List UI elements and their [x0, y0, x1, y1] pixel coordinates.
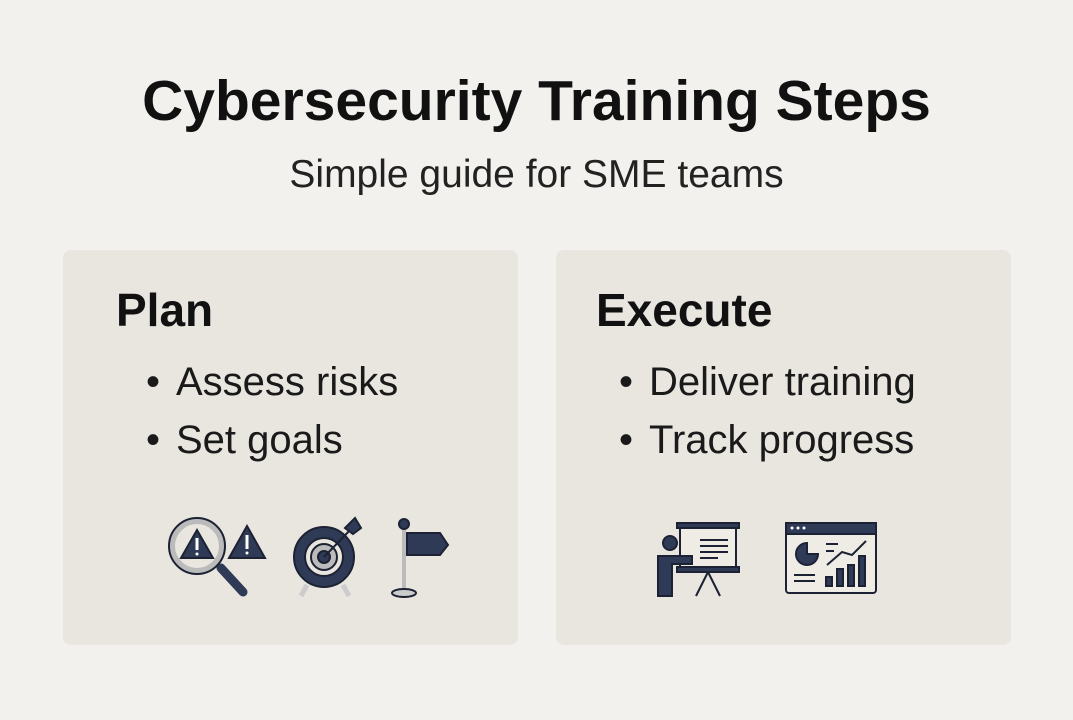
icons: plan [168, 516, 450, 598]
heading: execute: Execute [596, 284, 772, 336]
panel: plan: • [146, 418, 160, 462]
bullet: deliver training: Deliver training [649, 360, 916, 404]
icon: dashboard [786, 523, 876, 593]
bullet: set goals: Set goals [176, 418, 343, 462]
icons: execute [657, 522, 877, 597]
icon: presenter [658, 523, 739, 596]
panel: execute [556, 250, 1011, 645]
panel: execute: • [619, 360, 633, 404]
icon: target [294, 518, 361, 596]
panel: plan [63, 250, 518, 645]
bullet: track progress: Track progress [649, 418, 914, 462]
panel: execute: • [619, 418, 633, 462]
icon: flag [392, 519, 448, 597]
subtitle: Simple guide for SME teams [289, 153, 784, 196]
bullet: assess risks: Assess risks [176, 360, 398, 404]
heading: plan: Plan [116, 284, 213, 336]
icon: magnifier warning [169, 518, 265, 592]
title: Cybersecurity Training Steps [142, 69, 931, 133]
panel: plan: • [146, 360, 160, 404]
